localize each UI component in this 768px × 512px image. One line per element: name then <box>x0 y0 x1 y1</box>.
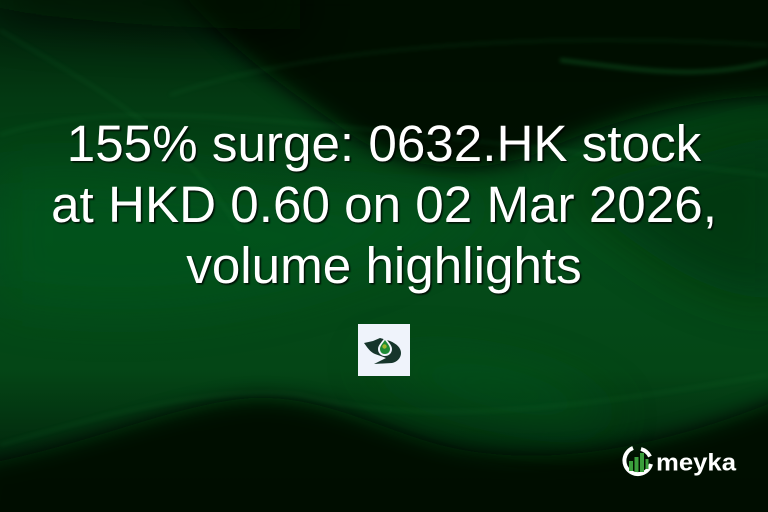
icon: company logo <box>358 324 410 376</box>
title: at HKD 0.60 on 02 Mar 2026, <box>51 176 717 233</box>
icon: meyka ring with bars <box>624 448 651 474</box>
title: 155% surge: 0632.HK stock <box>67 115 701 172</box>
title <box>51 115 717 296</box>
title: volume highlights <box>186 237 582 294</box>
brand wordmark: meyka <box>656 450 737 476</box>
brand: meyka logo <box>622 446 737 476</box>
